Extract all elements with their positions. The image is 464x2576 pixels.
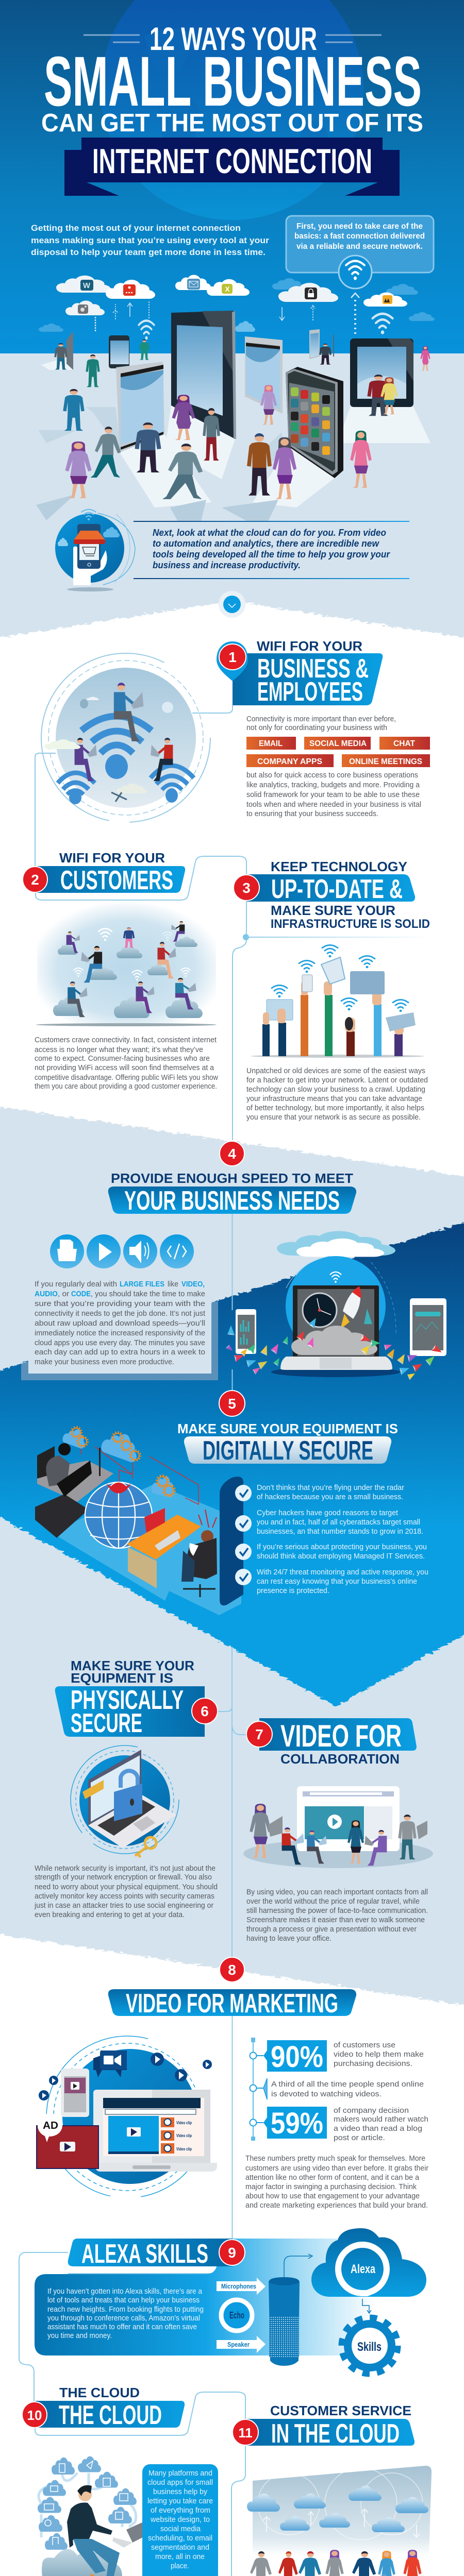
- illustration: clouds and devices: [36, 275, 435, 521]
- stat: 90 percent: 90%: [271, 2040, 323, 2074]
- heading: VIDEO FOR MARKETING: [126, 1989, 338, 2019]
- body text: through a process or give a presentation without ever: [246, 1925, 417, 1934]
- text: next, the cloud: Next, look at what the cloud can do for you. From video: [153, 527, 386, 538]
- device: right tablet: [350, 338, 413, 407]
- cloud app icons: [78, 279, 392, 314]
- section 10: the cloud: [22, 2385, 219, 2576]
- divider node: [243, 934, 432, 940]
- body text: your infrastructure means that you can take advantage: [246, 1095, 422, 1103]
- heading: 3: [242, 880, 251, 896]
- label: microphones arrow: [217, 2278, 266, 2295]
- section 8: video for marketing: [37, 1957, 428, 2210]
- text panel: [21, 1278, 218, 1380]
- globe: [85, 1482, 152, 1548]
- text panel: CODE: [71, 1290, 91, 1298]
- heading: DIGITALLY SECURE: [203, 1436, 373, 1466]
- text panel: sure that you’re providing your team with the: [35, 1300, 205, 1308]
- body text: assistant has much to offer and it can often save: [47, 2323, 197, 2331]
- list text: Don’t thinks that you’re flying under the radar: [257, 1484, 404, 1492]
- callout: basics: [286, 216, 434, 289]
- section 9: alexa skills: [35, 2228, 426, 2374]
- section 2: wifi for customers: [23, 850, 218, 1091]
- heading: CUSTOMER SERVICE: [270, 2403, 411, 2418]
- heading: MAKE SURE YOUR: [71, 1658, 194, 1673]
- heading: CUSTOMERS: [60, 866, 173, 895]
- connector lines: [19, 705, 247, 2576]
- body text: By using video, you can reach important contacts from all: [246, 1888, 428, 1896]
- stat: a third: [271, 2080, 424, 2098]
- body text: need to worry about your physical equipment. You should: [35, 1883, 218, 1891]
- tag buttons: COMPANY APPS: [257, 757, 322, 766]
- text panel: If you regularly deal with: [35, 1280, 117, 1289]
- body text: Unpatched or old devices are some of the easiest ways: [246, 1067, 425, 1075]
- heading: YOUR BUSINESS NEEDS: [124, 1186, 340, 1216]
- heading: UP-TO-DATE &: [271, 874, 403, 904]
- blue callout: cloud apps for small: [147, 2478, 213, 2487]
- list text: With 24/7 threat monitoring and active response, you: [257, 1568, 428, 1577]
- text panel: LARGE FILES: [120, 1280, 164, 1289]
- text panel: about raw upload and download speeds—you’ll: [35, 1319, 205, 1328]
- heading: IN THE CLOUD: [271, 2419, 400, 2449]
- heading: PROVIDE ENOUGH SPEED TO MEET: [111, 1171, 353, 1186]
- body text: competitive disadvantage. Offering public WiFi lets you show: [35, 1074, 218, 1082]
- page background: header sky: [0, 0, 464, 355]
- wifi signal right: [372, 314, 393, 334]
- number badge: 4: [228, 1146, 236, 1162]
- body text: just in case an attacker tries to use social engineering or: [34, 1902, 213, 1910]
- blue callout: of everything from: [151, 2506, 210, 2515]
- body text: [34, 1865, 218, 1919]
- body text: strength of your network encryption or firewall. You also: [35, 1873, 212, 1882]
- intro text: disposal to help your team get more done in less time.: [31, 247, 266, 257]
- intro body lines: Connectivity is more important than ever before,: [246, 715, 396, 723]
- heading: 1: [228, 649, 237, 665]
- body text: you ensure that your network is as secure as possible.: [246, 1113, 421, 1122]
- heading: [246, 1718, 417, 1767]
- blue callout: place.: [171, 2562, 189, 2570]
- stat: a third: is devoted to watching videos.: [271, 2090, 382, 2098]
- tag buttons: [246, 737, 430, 767]
- heading: VIDEO FOR: [280, 1719, 402, 1753]
- illustration: hands with devices: [251, 945, 424, 1058]
- callout: basics: via a reliable and secure network.: [296, 242, 423, 251]
- body text: still harnessing the power of face-to-face communication.: [246, 1907, 428, 1915]
- heading: MAKE SURE YOUR: [271, 903, 395, 918]
- body text: like analytics, tracking, budgets and more. Providing a: [246, 781, 420, 789]
- heading: WIFI FOR YOUR: [59, 850, 165, 866]
- body text: While network security is important, it’s not just about the: [35, 1865, 216, 1873]
- text: next, the cloud: to automation and analytics, there are incredible new: [153, 538, 380, 549]
- text panel: , or: [58, 1290, 69, 1298]
- heading: [177, 1421, 398, 1466]
- blue callout: social media: [160, 2524, 201, 2533]
- intro text: Getting the most out of your internet connection: [31, 223, 241, 233]
- body text: [245, 2155, 428, 2210]
- text panel: like: [168, 1280, 178, 1289]
- illustration: video ads: AD: [43, 2120, 58, 2131]
- illustration: video meeting: [243, 1786, 433, 1868]
- tag buttons: EMAIL: [259, 739, 283, 748]
- number badge: [220, 1957, 244, 1982]
- background: blue security section: [0, 1219, 464, 1706]
- heading: SECURE: [71, 1708, 142, 1738]
- heading: 6: [201, 1703, 209, 1719]
- body text: you through to conference calls, Amazon’s virtual: [47, 2314, 200, 2323]
- stat: 90 percent: video to help them make: [334, 2050, 424, 2059]
- section 7: video for collaboration: [243, 1718, 433, 1943]
- people in the header illustration: [54, 340, 430, 499]
- blue callout: business help by: [153, 2487, 207, 2496]
- tag buttons: SOCIAL MEDIA: [309, 739, 367, 748]
- number badge: 8: [228, 1962, 236, 1978]
- heading: COLLABORATION: [280, 1751, 400, 1767]
- blue callout: scheduling, to email: [148, 2534, 212, 2543]
- illustration: man on cloud with app clouds: [38, 2456, 143, 2576]
- label: echo: [221, 2300, 252, 2331]
- list text: of hackers because you are a small business.: [257, 1493, 403, 1501]
- body text: over the world without the price of regular travel, while: [246, 1897, 420, 1906]
- text panel: each day can add up to extra hours in a week to: [35, 1348, 205, 1357]
- file type icons: [50, 1234, 194, 1268]
- callout: basics: First, you need to take care of the: [296, 222, 423, 231]
- stat: a third: A third of all the time people spend online: [271, 2080, 424, 2089]
- heading: [217, 638, 383, 707]
- intro body lines: [246, 715, 396, 732]
- body text: access is no longer what they want; it’s what they’ve: [35, 1046, 203, 1054]
- label: microphones arrow: Microphones: [221, 2282, 256, 2290]
- illustration: video ads: Video clip: [176, 2121, 192, 2125]
- text: next, the cloud: business and increase productivity.: [153, 560, 301, 570]
- cloud app icons: X: [225, 285, 230, 293]
- body text: you time and money.: [47, 2332, 112, 2340]
- heading: [234, 859, 430, 931]
- text panel: , you should take the time to make: [91, 1290, 205, 1298]
- body text: major factor in swinging a purchasing decision. Think: [245, 2183, 417, 2191]
- label: speaker arrow: Speaker: [227, 2341, 250, 2348]
- label: speaker arrow: [217, 2336, 266, 2353]
- heading: THE CLOUD: [59, 2385, 140, 2400]
- skills gear: [342, 2318, 397, 2374]
- body text: attention like no other form of content, and it can be a: [245, 2174, 420, 2182]
- heading: THE CLOUD: [59, 2400, 162, 2430]
- stat: 90 percent: [263, 2040, 424, 2074]
- body text: tools when and where needed in your business is vital: [246, 801, 421, 809]
- body text: not providing WiFi access will soon find themselves at a: [35, 1064, 214, 1072]
- illustration: video ads: [37, 2036, 217, 2198]
- stat: 59 percent: a video than read a blog: [334, 2125, 422, 2133]
- heading: 10: [27, 2408, 42, 2423]
- title ribbon: [64, 138, 400, 196]
- illustration: people on clouds: [36, 901, 217, 1026]
- light cones on floor: [41, 355, 430, 507]
- body text: solid framework for your team to be able to use these: [246, 791, 420, 799]
- heading: [233, 2403, 415, 2449]
- icon: wifi badge: [339, 256, 372, 289]
- text panel: connectivity it needs to get the job done. It’s not just: [35, 1310, 205, 1318]
- number badge: 5: [228, 1396, 236, 1412]
- body text: [47, 2287, 204, 2340]
- body text: technology can slow your business to a crawl. Updating: [246, 1086, 425, 1094]
- cloud app icons: W: [83, 281, 91, 290]
- section 3: keep technology up to date: [234, 859, 432, 1122]
- app clouds: [56, 275, 407, 315]
- heading: KEEP TECHNOLOGY: [271, 859, 407, 874]
- stat: 59 percent: post or article.: [334, 2134, 385, 2142]
- alexa gradient panel: [35, 2239, 376, 2355]
- illustration: video ads: Video clip: [176, 2147, 192, 2151]
- floor shadows: [36, 407, 289, 521]
- label: echo: Echo: [229, 2310, 244, 2320]
- icon: chevron badge: [219, 591, 245, 618]
- echo speaker: [269, 2254, 312, 2366]
- heading: INFRASTRUCTURE IS SOLID: [271, 917, 430, 931]
- stat: 59 percent: 59%: [271, 2107, 323, 2140]
- wifi signals: [139, 320, 154, 340]
- number badge: [219, 1391, 245, 1416]
- body text: even breaking and entering to get at your data.: [35, 1911, 185, 1919]
- stat: 59 percent: [263, 2107, 428, 2142]
- stat: 59 percent: makers would rather watch: [334, 2115, 428, 2124]
- title line 1: 12 WAYS YOUR: [150, 21, 317, 57]
- heading: 7: [255, 1726, 263, 1742]
- device: far phone: [309, 329, 334, 359]
- heading: EMPLOYEES: [257, 677, 363, 707]
- body text: These numbers pretty much speak for themselves. More: [245, 2155, 425, 2163]
- list text: If you’re serious about protecting your business, you: [257, 1543, 427, 1551]
- list text: Cyber hackers have good reasons to target: [257, 1509, 398, 1517]
- tag buttons: CHAT: [393, 739, 415, 748]
- heading: PHYSICALLY: [71, 1685, 184, 1715]
- list text: presence is protected.: [257, 1587, 329, 1595]
- body text: of better technology, but more importantly, it also helps: [246, 1104, 424, 1112]
- illustration: laptop rocket speed: [225, 1231, 446, 1381]
- stat: 90 percent: purchasing decisions.: [334, 2060, 412, 2068]
- page background: floor: [0, 353, 464, 2054]
- section 4: provide enough speed: [21, 1141, 446, 1381]
- body text: [246, 1067, 428, 1122]
- body text: [35, 1036, 218, 1091]
- device: silver phone: [116, 362, 164, 452]
- stat rail: [250, 2038, 267, 2141]
- body text: Screenshare makes it easier than ever to walk someone: [246, 1916, 425, 1924]
- text panel: AUDIO: [35, 1290, 58, 1298]
- text panel: cloud apps you use every day. The minutes you save: [35, 1339, 205, 1347]
- heading: WIFI FOR YOUR: [257, 638, 362, 654]
- body text: but also for quick access to core business operations: [246, 771, 418, 779]
- data arrows: [95, 293, 359, 334]
- illustration: video ads: Video clip: [176, 2133, 192, 2138]
- heading: EQUIPMENT IS: [71, 1670, 173, 1686]
- device: big smartphone with apps: [286, 367, 343, 478]
- section 11: customer service in the cloud: [233, 2403, 432, 2576]
- text: next, the cloud: [134, 521, 409, 579]
- text panel: VIDEO,: [181, 1280, 205, 1289]
- body text: [246, 771, 421, 818]
- body text: [246, 1888, 428, 1943]
- body text: lot of tools and treats that can help your business: [47, 2296, 200, 2304]
- alexa cloud: [311, 2228, 426, 2313]
- device: grey panel: [67, 331, 73, 370]
- device: large tablet: [171, 311, 236, 439]
- stat: 59 percent: of company decision: [334, 2107, 409, 2115]
- tag buttons: ONLINE MEETINGS: [349, 757, 422, 766]
- heading: [22, 2385, 185, 2430]
- section 6: physically secure: [34, 1658, 218, 1919]
- background: white section two: [0, 1933, 464, 2576]
- globe behind title: [101, 0, 363, 220]
- icon: mobile store: [55, 510, 135, 591]
- blue callout: [142, 2464, 218, 2576]
- list text: [257, 1484, 428, 1595]
- intro body lines: not only for coordinating your business with: [246, 724, 387, 732]
- check list strip: [220, 1477, 252, 1605]
- intro text: [31, 223, 269, 257]
- body text: actively monitor key access points with security cameras: [35, 1892, 214, 1901]
- number badge: [220, 1141, 244, 1166]
- list text: should think about employing Managed IT Services.: [257, 1552, 425, 1561]
- body text: customers are using video than ever before. It grabs their: [245, 2164, 428, 2173]
- title block: [41, 21, 423, 196]
- text: next, the cloud: tools being developed all the time to help you grow your: [153, 549, 391, 560]
- heading: [108, 1171, 356, 1216]
- body text: having to leave your office.: [246, 1935, 332, 1943]
- heading: 2: [31, 872, 39, 888]
- hacker desk: [35, 1443, 113, 1538]
- list text: businesses, an that number stands to grow in 2018.: [257, 1528, 423, 1536]
- body text: Customers crave connectivity. In fact, consistent internet: [35, 1036, 217, 1044]
- heading: MAKE SURE YOUR EQUIPMENT IS: [177, 1421, 398, 1436]
- heading: 11: [238, 2425, 253, 2441]
- body text: them you care about providing a good customer experience.: [35, 1082, 217, 1091]
- background: white section one: [0, 601, 464, 1178]
- device: small dark phone: [109, 335, 129, 368]
- blue callout: segmentation and: [151, 2543, 209, 2552]
- section 1: wifi for business and employees: [41, 638, 430, 822]
- body text: for a hacker to get into your network. Latent or outdated: [246, 1076, 428, 1084]
- text panel: make your business even more productive.: [35, 1358, 174, 1366]
- heading: [23, 850, 185, 895]
- victim desk: [127, 1508, 217, 1597]
- stat: 90 percent: of customers use: [334, 2041, 395, 2049]
- body text: to ensuring that your business succeeds.: [246, 810, 378, 818]
- blue callout: more, all in one: [155, 2552, 205, 2561]
- skills gear: Skills: [357, 2340, 382, 2354]
- body text: If you haven’t gotten into Alexa skills, there’s are a: [47, 2287, 203, 2296]
- heading: ALEXA SKILLS: [81, 2239, 208, 2269]
- pale background clouds: [39, 278, 435, 332]
- title line 3: CAN GET THE MOST OUT OF ITS: [41, 109, 423, 137]
- blue callout: letting you take care: [147, 2497, 213, 2505]
- intro text: means making sure that you’re using every tool at your: [31, 235, 269, 245]
- body text: come to expect. Consumer-facing businesses who are: [35, 1055, 210, 1063]
- section 5: digitally secure: [35, 1391, 428, 1615]
- list text: you and in fact, half of all cyberattacks target small: [257, 1518, 420, 1527]
- body text: reach new heights. From booking flights to putting: [47, 2306, 204, 2314]
- text panel: immediately notice the increased responsivity of the: [35, 1329, 205, 1337]
- list text: can rest easy knowing that your business’s online: [257, 1578, 417, 1586]
- illustration: people below clouds: [246, 2466, 432, 2576]
- device: center right phone: [245, 336, 283, 414]
- illustration: hacker attack: [35, 1426, 241, 1615]
- body text: about how to use that engagement to your advantage: [245, 2192, 420, 2200]
- heading: BUSINESS &: [257, 654, 369, 684]
- title decorative rules: [84, 35, 382, 42]
- heading: [108, 1989, 356, 2019]
- heading: [55, 1658, 218, 1738]
- illustration: wifi circle with people: [41, 653, 210, 822]
- callout: basics: basics: a fast connection delivered: [294, 232, 425, 241]
- heading: 9: [228, 2245, 236, 2261]
- blue callout: website design, to: [150, 2515, 210, 2524]
- illustration: laptop lock: [71, 1745, 179, 1857]
- body text: and create marketing experiences that build your brand.: [245, 2201, 428, 2210]
- blue callout: Many platforms and: [148, 2469, 212, 2478]
- alexa cloud: Alexa: [351, 2262, 375, 2276]
